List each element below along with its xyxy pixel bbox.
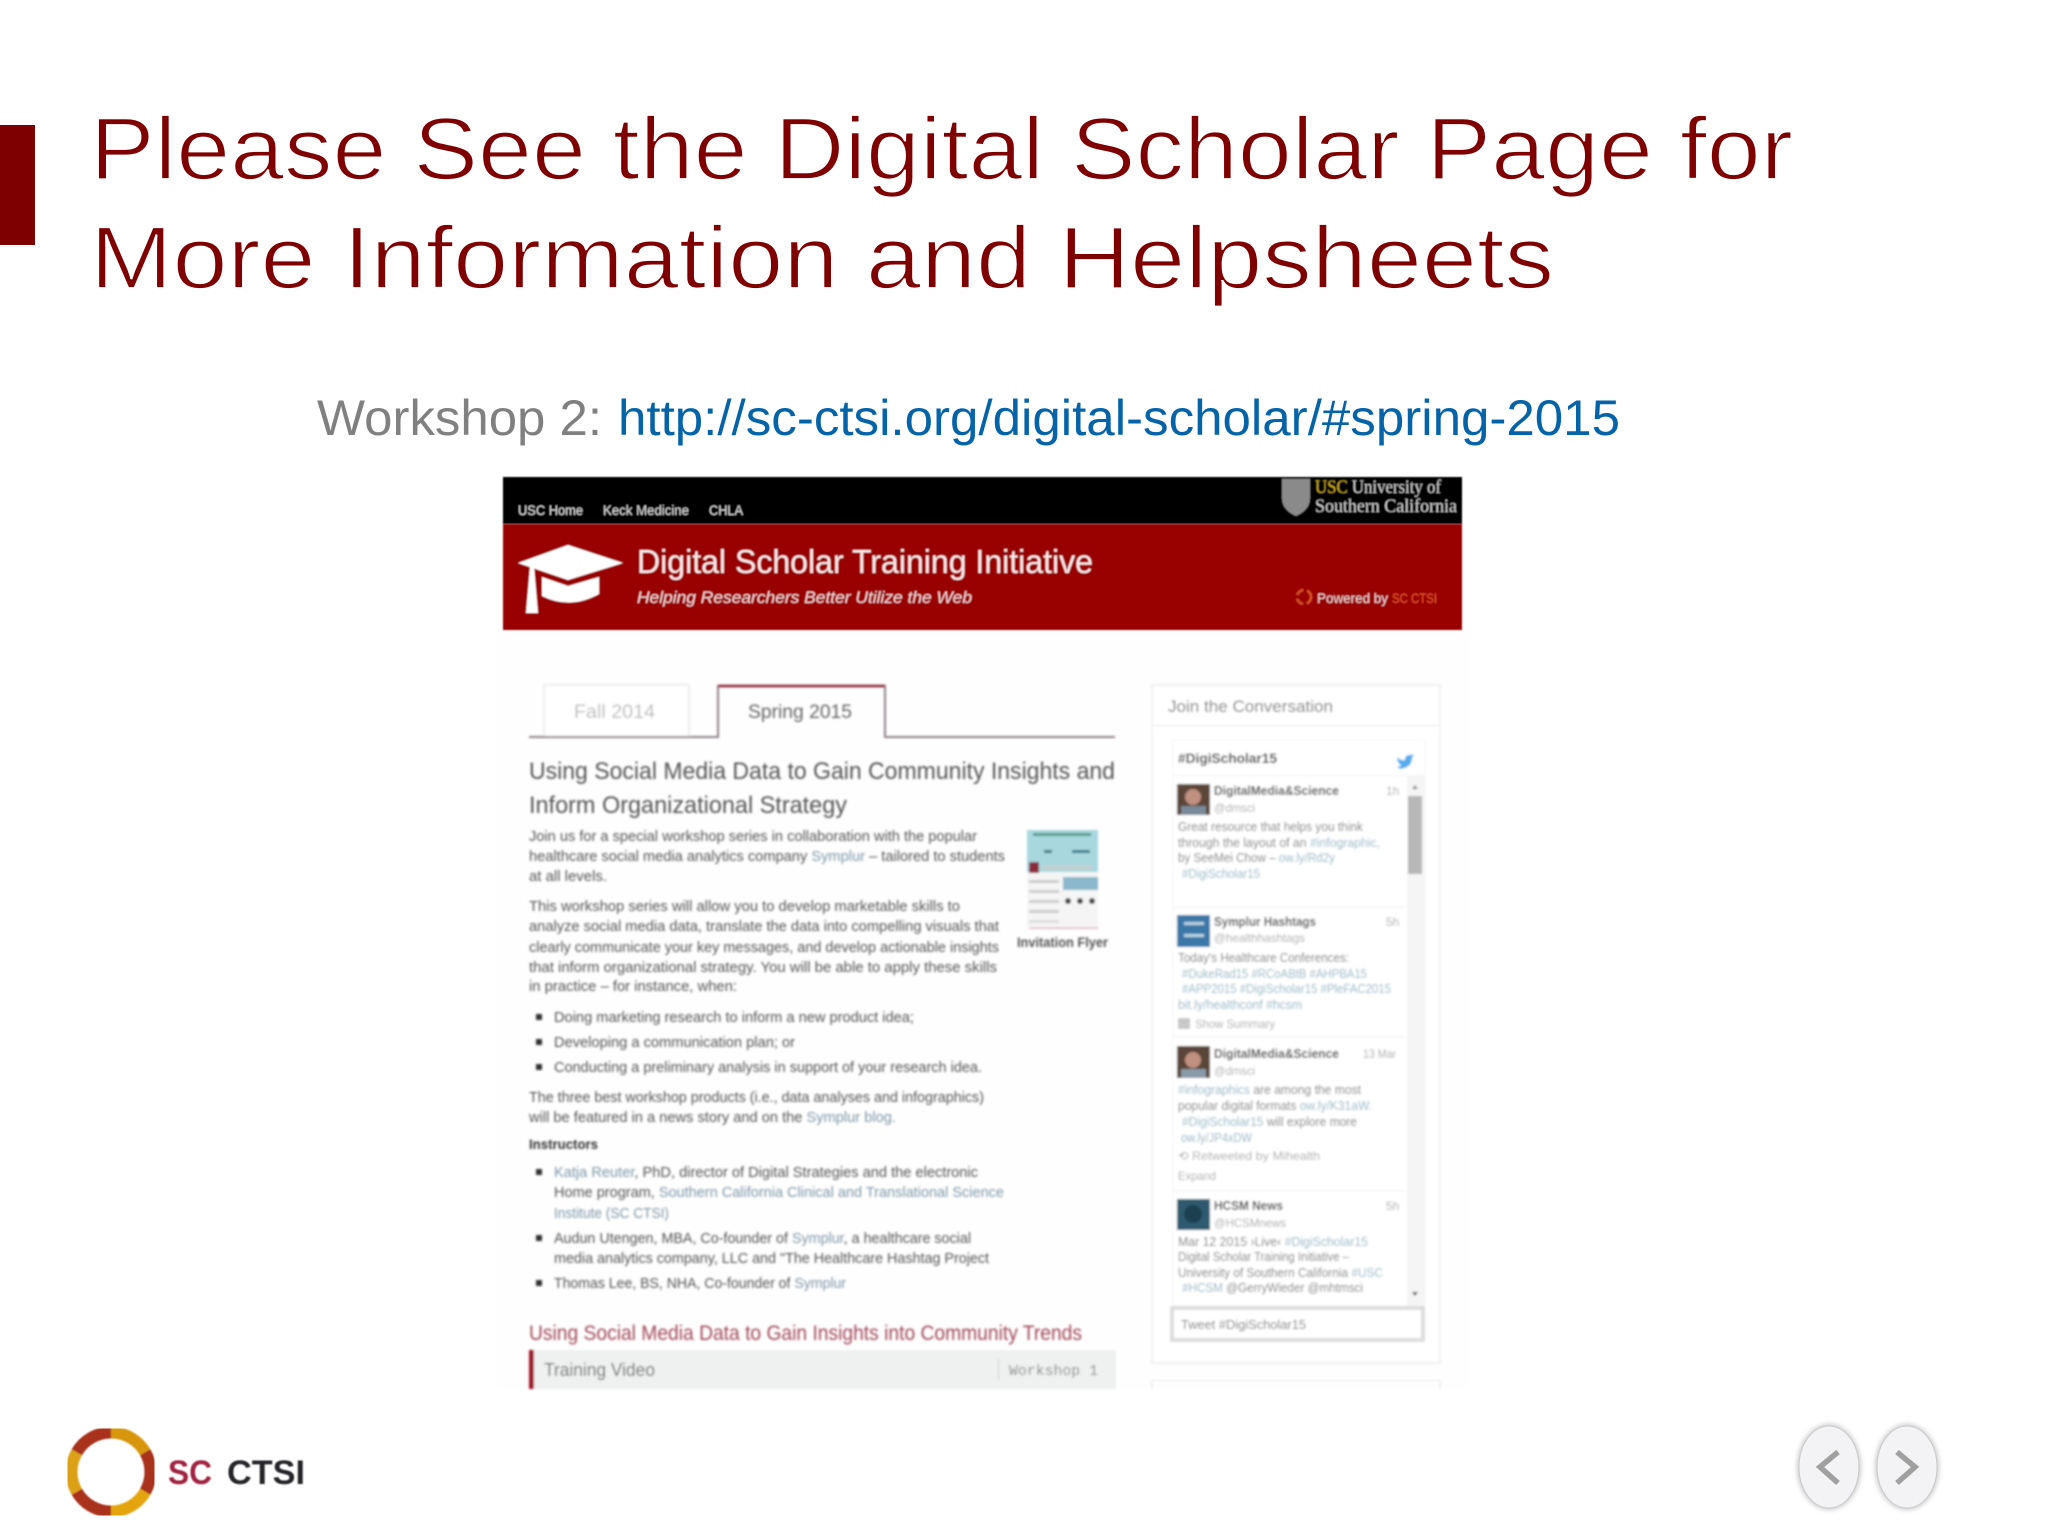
- tweet 1: @dmsci: [1214, 801, 1255, 815]
- tweet 3: @dmsci: [1214, 1064, 1255, 1078]
- intro paragraphs: This workshop series will allow you to develop marketable skills to: [529, 899, 960, 915]
- intro paragraphs: at all levels.: [529, 869, 607, 885]
- logo wordmark: CTSI: [227, 1454, 305, 1492]
- tweet 4: HCSM News: [1214, 1199, 1283, 1213]
- tweet 1: Great resource that helps you think: [1178, 820, 1364, 834]
- sidebar heading: Join the Conversation: [1168, 697, 1333, 716]
- website screenshot: [497, 477, 1469, 1389]
- top nav links: [518, 502, 744, 518]
- tweet 1: 1h: [1386, 784, 1399, 798]
- tweet 4: Mar 12 2015 ›Live‹ #DigiScholar15: [1178, 1235, 1368, 1249]
- bullet list: uses: Conducting a preliminary analysis in support of your research idea.: [554, 1060, 982, 1076]
- bullet list: instructors: Institute (SC CTSI): [554, 1206, 669, 1222]
- products paragraph: The three best workshop products (i.e., data analyses and infographics): [529, 1090, 984, 1106]
- tweet 4: @HCSMnews: [1214, 1216, 1286, 1230]
- tweet 2: 5h: [1386, 915, 1399, 929]
- tweet 2: bit.ly/healthconf #hcsm: [1178, 998, 1302, 1012]
- accent bar: [0, 125, 35, 245]
- intro paragraphs: analyze social media data, translate the data into compelling visuals that: [529, 919, 999, 935]
- training video row: [529, 1350, 1116, 1389]
- intro paragraphs: in practice – for instance, when:: [529, 979, 737, 995]
- bullet list: instructors: [536, 1165, 1004, 1292]
- intro paragraphs: Join us for a special workshop series in collaboration with the popular: [529, 829, 977, 845]
- intro paragraphs: that inform organizational strategy. You will be able to apply these skills: [529, 960, 997, 976]
- tweet 4: Digital Scholar Training Initiative –: [1178, 1250, 1349, 1264]
- site header: top black bar: [503, 477, 1462, 524]
- instructors heading: Instructors: [529, 1136, 598, 1152]
- bullet list: uses: [536, 1010, 982, 1076]
- main column: [528, 685, 1116, 1389]
- tweet input box: [1172, 1308, 1423, 1340]
- widget hashtag: #DigiScholar15: [1178, 750, 1277, 766]
- tweet 2: Show Summary: [1195, 1017, 1275, 1031]
- powered by: Powered by: [1317, 590, 1388, 606]
- page backdrop: [497, 630, 1469, 1389]
- logo wordmark: SC: [168, 1454, 212, 1492]
- tweet 1: #DigiScholar15: [1182, 867, 1260, 881]
- tweet 4: #HCSM @GerryWieder @mhtmsci: [1182, 1281, 1363, 1295]
- tweet 2: [1177, 915, 1399, 1031]
- tweet 3: #infographics are among the most: [1178, 1083, 1361, 1097]
- tweet 3: 13 Mar: [1363, 1047, 1396, 1061]
- tweet 2: Symplur Hashtags: [1214, 915, 1316, 929]
- bullet list: instructors: Audun Utengen, MBA, Co-founder of Symplur, a healthcare social: [554, 1231, 971, 1247]
- icon: twitter bird: [1396, 754, 1414, 769]
- logo wordmark: [168, 1454, 305, 1492]
- next sidebar panel edge: [1152, 1380, 1440, 1389]
- intro paragraphs: healthcare social media analytics company Symplur – tailored to students: [529, 849, 1005, 865]
- tweet input box: Tweet #DigiScholar15: [1181, 1318, 1306, 1332]
- bullet list: instructors: Home program, Southern California Clinical and Translational Science: [554, 1185, 1004, 1201]
- SC CTSI logo: [72, 1432, 305, 1512]
- scrollbar: [1407, 775, 1425, 1306]
- workshop link line: http://sc-ctsi.org/digital-scholar/#spring-2015: [618, 390, 1620, 446]
- tabs: Spring 2015: [748, 702, 852, 723]
- tweet 2: Today's Healthcare Conferences:: [1178, 951, 1349, 965]
- tweet 2: #DukeRad15 #RCoABtB #AHPBA15: [1182, 967, 1367, 981]
- title: More Information and Helpsheets: [90, 208, 1554, 307]
- tweet 3: ⟲ Retweeted by Mihealth: [1178, 1149, 1320, 1163]
- tweet 1: [1177, 784, 1399, 881]
- tweet 1: by SeeMei Chow – ow.ly/Rd2y: [1178, 851, 1336, 865]
- USC wordmark: Southern California: [1315, 496, 1458, 517]
- title: Please See the Digital Scholar Page for: [90, 99, 1793, 198]
- icon: previous button: [1797, 1424, 1861, 1510]
- USC wordmark: [1315, 477, 1458, 517]
- top nav links: Keck Medicine: [603, 502, 689, 518]
- tweet 4: University of Southern California #USC: [1178, 1266, 1383, 1280]
- logo ring: [72, 1432, 150, 1512]
- bullet list: instructors: Thomas Lee, BS, NHA, Co-founder of Symplur: [554, 1276, 846, 1292]
- USC wordmark: USC University of: [1315, 477, 1442, 498]
- article heading: [529, 758, 1115, 819]
- banner title: Digital Scholar Training Initiative: [637, 543, 1093, 580]
- tweet 3: DigitalMedia&Science: [1214, 1047, 1339, 1061]
- article heading: Using Social Media Data to Gain Community Insights and: [529, 758, 1115, 785]
- tweet 3: ow.ly/JP4xDW: [1181, 1131, 1252, 1145]
- flyer caption: Invitation Flyer: [1017, 935, 1109, 950]
- banner subtitle: Helping Researchers Better Utilize the Web: [637, 588, 972, 607]
- tweet 2: @healthhashtags: [1214, 931, 1305, 945]
- top nav links: USC Home: [518, 502, 583, 518]
- tweet 2: #APP2015 #DigiScholar15 #PleFAC2015: [1182, 982, 1391, 996]
- twitter widget: [1172, 740, 1425, 1340]
- training video row: Workshop 1: [1009, 1363, 1098, 1380]
- article heading: Inform Organizational Strategy: [529, 792, 847, 819]
- top nav links: CHLA: [709, 502, 744, 518]
- tweet 4: [1177, 1199, 1399, 1295]
- icon: next button: [1875, 1424, 1939, 1510]
- tweet 4: 5h: [1386, 1199, 1399, 1213]
- icon: graduation cap: [518, 545, 623, 613]
- products paragraph: will be featured in a news story and on the Symplur blog.: [528, 1110, 896, 1126]
- tweet 3: #DigiScholar15 will explore more: [1182, 1115, 1357, 1129]
- bullet list: uses: Developing a communication plan; or: [554, 1035, 795, 1051]
- tabs: [529, 685, 1115, 737]
- bullet list: uses: Doing marketing research to inform a new product idea;: [554, 1010, 914, 1026]
- products paragraph: [528, 1090, 984, 1126]
- intro paragraphs: clearly communicate your key messages, and develop actionable insights: [529, 940, 999, 956]
- bullet list: instructors: Katja Reuter, PhD, director of Digital Strategies and the electronic: [554, 1165, 978, 1181]
- training video row: Training Video: [544, 1360, 655, 1380]
- workshop link line: Workshop 2:: [317, 390, 602, 446]
- site header: red banner: [503, 524, 1462, 630]
- tweet 3: popular digital formats ow.ly/K31aW.: [1178, 1099, 1372, 1113]
- tweet 3: [1177, 1046, 1396, 1183]
- intro paragraphs: [529, 829, 1005, 995]
- tweet 1: through the layout of an #infographic,: [1178, 836, 1380, 850]
- tabs: Fall 2014: [574, 702, 655, 723]
- powered by: [1297, 590, 1437, 606]
- tweet 1: DigitalMedia&Science: [1214, 784, 1339, 798]
- icon: USC shield: [1282, 479, 1310, 516]
- bullet list: instructors: media analytics company, LLC and "The Healthcare Hashtag Project: [554, 1251, 989, 1267]
- sidebar panel: [1152, 685, 1440, 1363]
- title: [90, 99, 1793, 307]
- powered by: SC CTSI: [1392, 590, 1437, 606]
- tweet 3: Expand: [1178, 1169, 1216, 1183]
- section heading: workshop 1: Using Social Media Data to Gain Insights into Community Trends: [529, 1322, 1082, 1345]
- invitation flyer thumbnail: [1017, 830, 1109, 950]
